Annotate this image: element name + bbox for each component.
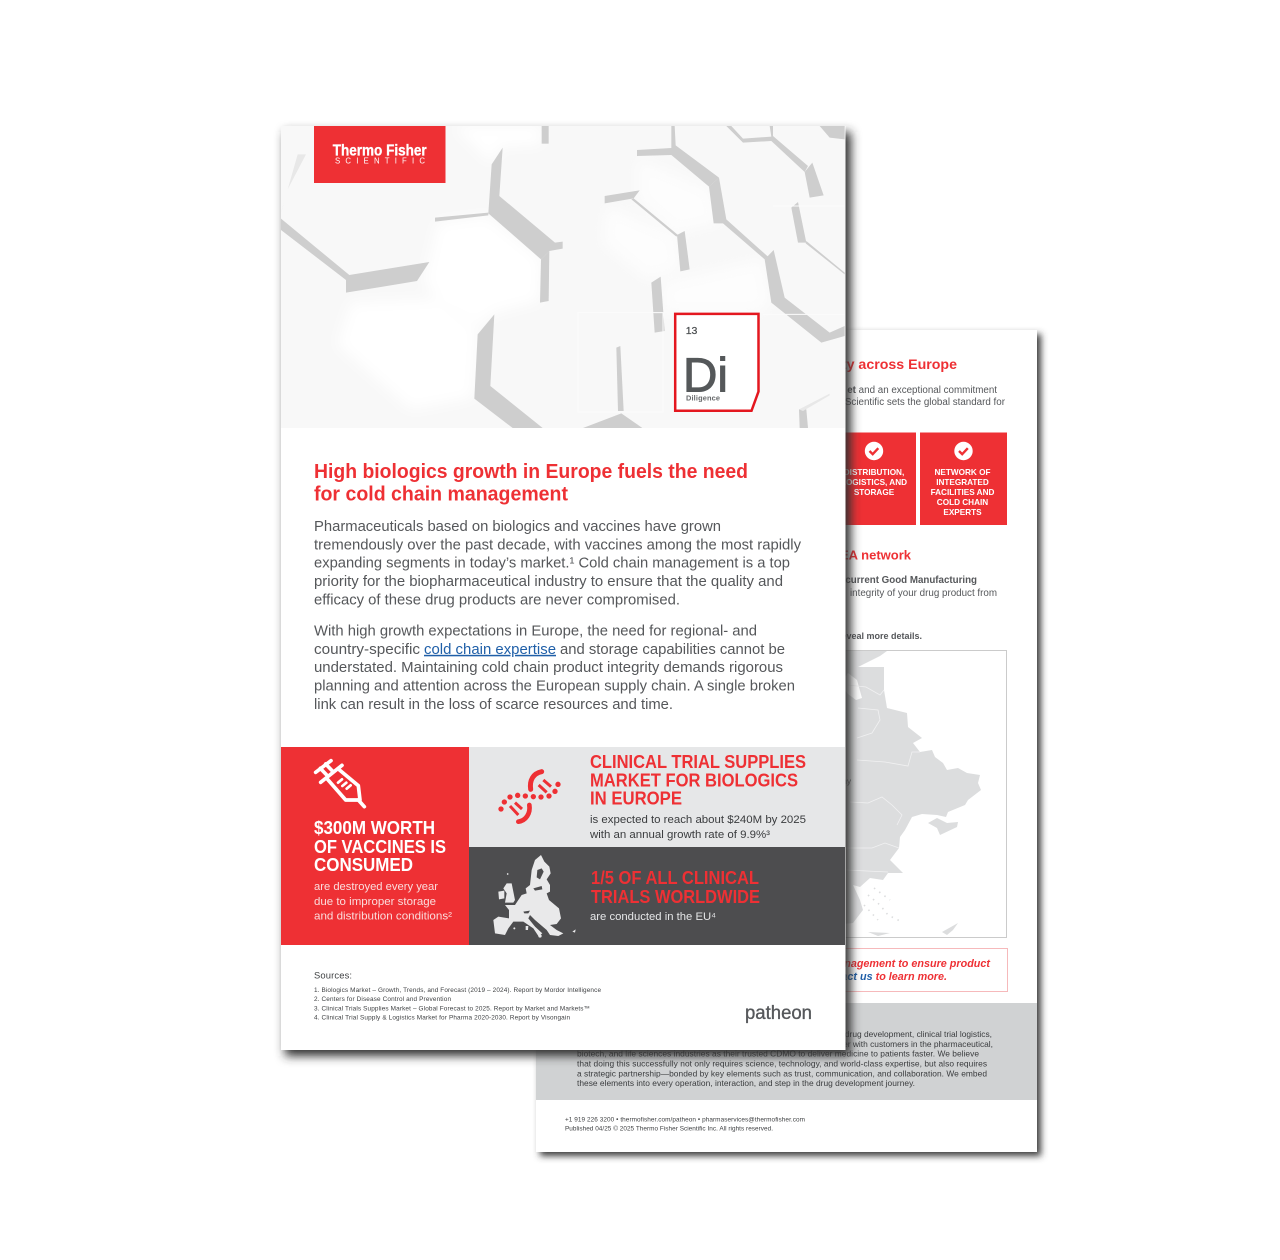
back page network text: current Good Manufacturing xyxy=(845,575,977,586)
paragraph 1: Pharmaceuticals based on biologics and vaccines have grown xyxy=(314,518,721,535)
icon: DNA helix xyxy=(498,772,561,822)
paragraph 2: link can result in the loss of scarce resources and time. xyxy=(314,696,673,713)
clinical trial headline: CLINICAL TRIAL SUPPLIES xyxy=(590,752,806,772)
paragraph 1: tremendously over the past decade, with vaccines among the most rapidly xyxy=(314,536,801,553)
about band: biotech, and life sciences industries as their trusted CDMO to deliver medicine to patients faster. We believe xyxy=(577,1048,979,1058)
clinical trial headline: IN EUROPE xyxy=(590,788,682,808)
front page sheet xyxy=(281,126,846,1050)
back page network text: integrity of your drug product from xyxy=(850,588,997,599)
stat panel: clinical trial supplies xyxy=(469,747,845,847)
back page shadow xyxy=(540,334,1041,1156)
back page footer xyxy=(565,1116,805,1132)
Thermo Fisher logo: Thermo Fisher xyxy=(333,142,427,159)
back page footer: Published 04/25 © 2025 Thermo Fisher Scientific Inc. All rights reserved. xyxy=(565,1124,773,1132)
sources: Sources: xyxy=(314,970,352,980)
clinical trial description: is expected to reach about $240M by 2025 xyxy=(590,814,806,826)
capability tile: network of integrated facilities: COLD CHAIN xyxy=(937,498,988,507)
vaccines description: and distribution conditions² xyxy=(314,910,452,922)
back page xyxy=(536,330,1041,1156)
vaccines description: are destroyed every year xyxy=(314,881,438,893)
call to action box: cold chain management to ensure product xyxy=(772,958,990,970)
back page network text xyxy=(838,575,997,641)
Diligence element tile xyxy=(675,314,758,411)
EU share headline: 1/5 OF ALL CLINICAL xyxy=(591,868,759,888)
icon: map of Europe xyxy=(493,855,576,938)
front page xyxy=(281,126,851,1056)
paragraph 1: efficacy of these drug products are never compromised. xyxy=(314,591,680,608)
Diligence element tile: Diligence xyxy=(686,394,720,403)
paragraph 2: With high growth expectations in Europe, the need for regional- and xyxy=(314,622,757,640)
capability tile: network of integrated facilities: NETWORK OF xyxy=(935,468,990,477)
about band xyxy=(536,1003,1037,1100)
EU share description: are conducted in the EU⁴ xyxy=(590,911,716,923)
main heading: for cold chain management xyxy=(314,482,568,506)
call to action box: contact us to learn more. xyxy=(819,971,947,983)
Thermo Fisher logo xyxy=(314,126,446,183)
hexagon cover image xyxy=(281,126,845,428)
vaccines headline: $300M WORTH xyxy=(314,818,435,838)
clinical trial description: with an annual growth rate of 9.9%³ xyxy=(589,829,770,841)
Thermo Fisher logo: SCIENTIFIC xyxy=(335,157,425,166)
EU share headline: TRIALS WORLDWIDE xyxy=(591,887,760,907)
capability tile: network of integrated facilities xyxy=(920,432,1007,525)
Diligence element tile: Di xyxy=(683,349,728,403)
paragraph 2: and storage capabilities cannot be xyxy=(560,641,785,658)
paragraph 2 xyxy=(314,622,795,713)
back page footer: +1 919 226 3200 • thermofisher.com/patheon • pharmaservices@thermofisher.com xyxy=(565,1116,805,1124)
capability tile: network of integrated facilities: FACILITIES AND xyxy=(931,488,994,497)
map of Europe: Germany xyxy=(818,777,851,786)
back page heading: quality across Europe: integrity across Europe xyxy=(799,357,957,373)
vaccines headline: OF VACCINES IS xyxy=(314,837,446,857)
back page network text: reveal more details. xyxy=(838,631,922,641)
clinical trial headline xyxy=(590,752,806,808)
paragraph 1: priority for the biopharmaceutical industry to ensure that the quality and xyxy=(314,573,783,590)
clinical trial description xyxy=(589,814,806,841)
capability tile: network of integrated facilities: EXPERTS xyxy=(943,508,982,517)
main heading: High biologics growth in Europe fuels the need xyxy=(314,460,748,483)
paragraph 1: expanding segments in today’s market.¹ Cold chain management is a top xyxy=(314,555,790,572)
stat panel: vaccines xyxy=(281,747,469,945)
sources xyxy=(314,970,601,1022)
vaccines description xyxy=(314,881,452,922)
sources: 2. Centers for Disease Control and Prevention xyxy=(314,996,451,1003)
capability tile: distribution, logistics and storage: STORAGE xyxy=(854,488,895,497)
paragraph 2: country-specific xyxy=(314,641,420,658)
main heading xyxy=(314,460,748,506)
stat panel: EU share of trials xyxy=(469,847,845,945)
back page heading: EMEA network: EMEA network xyxy=(820,548,912,562)
sources: 1. Biologics Market – Growth, Trends, and Forecast (2019 – 2024). Report by Mordor Intelligence xyxy=(314,987,601,994)
vaccines description: due to improper storage xyxy=(314,896,436,908)
capability tile: distribution, logistics and storage: DISTRIBUTION, xyxy=(844,468,904,477)
back page intro text: et and an exceptional commitment xyxy=(847,385,997,396)
about band: partner with customers in the pharmaceutical, xyxy=(824,1039,993,1049)
Diligence element tile: 13 xyxy=(686,325,698,337)
capability tile: network of integrated facilities: INTEGRATED xyxy=(936,478,989,487)
call to action box xyxy=(577,948,1008,992)
icon: syringe xyxy=(316,761,364,807)
sources: 4. Clinical Trial Supply & Logistics Market for Pharma 2020-2030. Report by Visongain xyxy=(314,1014,570,1022)
paragraph 1 xyxy=(314,518,801,608)
front page shadow xyxy=(285,132,851,1056)
about band: a strategic partnership—bonded by key elements such as trust, communication, and collaboration. We embed xyxy=(577,1068,987,1078)
about band: these elements into every operation, interaction, and step in the drug development journey. xyxy=(577,1078,915,1088)
back page sheet xyxy=(536,330,1037,1152)
back page intro text: Scientific sets the global standard for xyxy=(845,397,1006,408)
paragraph 2: cold chain expertise xyxy=(424,641,556,658)
paragraph 2: understated. Maintaining cold chain product integrity demands rigorous xyxy=(314,659,783,676)
capability tile: distribution, logistics and storage: LOGISTICS, AND xyxy=(841,478,907,487)
about band: drug development, clinical trial logistics, xyxy=(845,1029,992,1039)
capability tile: distribution, logistics and storage xyxy=(840,432,916,525)
vaccines headline xyxy=(314,818,446,875)
sources: 3. Clinical Trials Supplies Market – Global Forecast to 2025. Report by Market and Markets™ xyxy=(314,1006,590,1012)
back page intro text xyxy=(845,385,1006,408)
paragraph 2: planning and attention across the European supply chain. A single broken xyxy=(314,678,795,694)
patheon logo: patheon xyxy=(745,1002,812,1024)
EU share headline xyxy=(591,868,760,907)
map of Europe xyxy=(577,650,1006,938)
vaccines headline: CONSUMED xyxy=(314,855,413,875)
clinical trial headline: MARKET FOR BIOLOGICS xyxy=(590,770,798,790)
about band: that doing this successfully not only requires science, technology, and world-class expertise, but also requires xyxy=(577,1058,987,1068)
